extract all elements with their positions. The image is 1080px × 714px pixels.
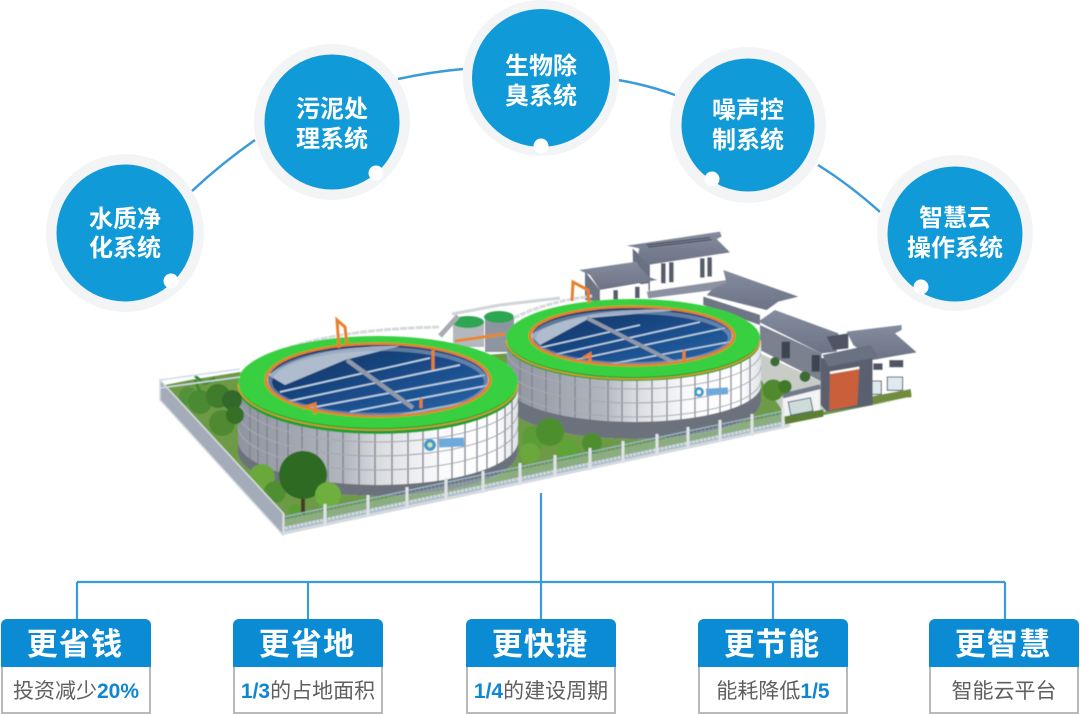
benefit card: saves energy: 能耗降低1/5 bbox=[716, 680, 830, 703]
signboard wall bbox=[783, 388, 820, 417]
gate house with red door bbox=[821, 353, 873, 412]
tank right bbox=[506, 282, 761, 450]
benefit card: faster bbox=[466, 619, 616, 713]
right side building bbox=[870, 348, 908, 405]
illustration: water treatment plant bbox=[160, 232, 917, 535]
benefit card: faster: 更快捷 bbox=[492, 627, 588, 662]
small process tanks bbox=[440, 298, 560, 352]
system circle: water purification: 化系统 bbox=[89, 235, 161, 262]
benefit card: saves money: 投资减少20% bbox=[13, 680, 139, 703]
connector lines between system circles bbox=[192, 69, 880, 212]
system circle: sludge treatment: 理系统 bbox=[296, 126, 368, 153]
system circle: sludge treatment: 污泥处 bbox=[296, 96, 368, 123]
benefit card: saves land: 更省地 bbox=[259, 627, 355, 662]
system circle: water purification bbox=[46, 154, 204, 312]
system circle: biological deodorization: 臭系统 bbox=[505, 83, 577, 110]
benefit card: saves energy: 更节能 bbox=[724, 627, 820, 662]
company logo left tank bbox=[424, 437, 464, 451]
rear upper building bbox=[633, 248, 723, 292]
system circle: biological deodorization: 生物除 bbox=[505, 53, 577, 80]
rear left building bbox=[585, 272, 648, 298]
platform edge bbox=[160, 388, 790, 535]
greenery bbox=[179, 376, 602, 516]
benefit card: smarter bbox=[929, 619, 1079, 713]
benefit card: saves land: 1/3的占地面积 bbox=[241, 680, 375, 703]
benefit card: faster: 1/4的建设周期 bbox=[474, 680, 608, 703]
system circle: noise control: 制系统 bbox=[712, 127, 784, 154]
system circle: sludge treatment bbox=[254, 44, 410, 200]
shrubs by the wall bbox=[763, 379, 784, 401]
buildings bbox=[579, 232, 917, 424]
benefit card: saves land bbox=[233, 619, 383, 713]
system circle: smart cloud operation: 操作系统 bbox=[907, 235, 1003, 262]
tank left bbox=[238, 320, 518, 500]
company logo right tank bbox=[694, 387, 728, 397]
benefit card: saves energy bbox=[698, 619, 848, 713]
benefit card: saves money: 更省钱 bbox=[27, 627, 123, 662]
benefit card: smarter: 更智慧 bbox=[955, 627, 1051, 662]
long low building bbox=[760, 325, 822, 382]
system circle: water purification: 水质净 bbox=[89, 206, 161, 233]
system circle: biological deodorization bbox=[463, 0, 619, 156]
benefit card: saves money bbox=[1, 619, 151, 713]
benefit card: smarter: 智能云平台 bbox=[952, 680, 1056, 703]
perimeter fence bbox=[160, 369, 783, 535]
system circle: smart cloud operation: 智慧云 bbox=[919, 205, 991, 232]
ground platform bbox=[160, 340, 912, 530]
connecting wing bbox=[647, 280, 727, 298]
connector tree to benefit cards bbox=[77, 493, 1005, 620]
system circle: noise control bbox=[670, 47, 826, 203]
system circle: smart cloud operation bbox=[877, 155, 1033, 311]
system circle: noise control: 噪声控 bbox=[712, 97, 784, 124]
